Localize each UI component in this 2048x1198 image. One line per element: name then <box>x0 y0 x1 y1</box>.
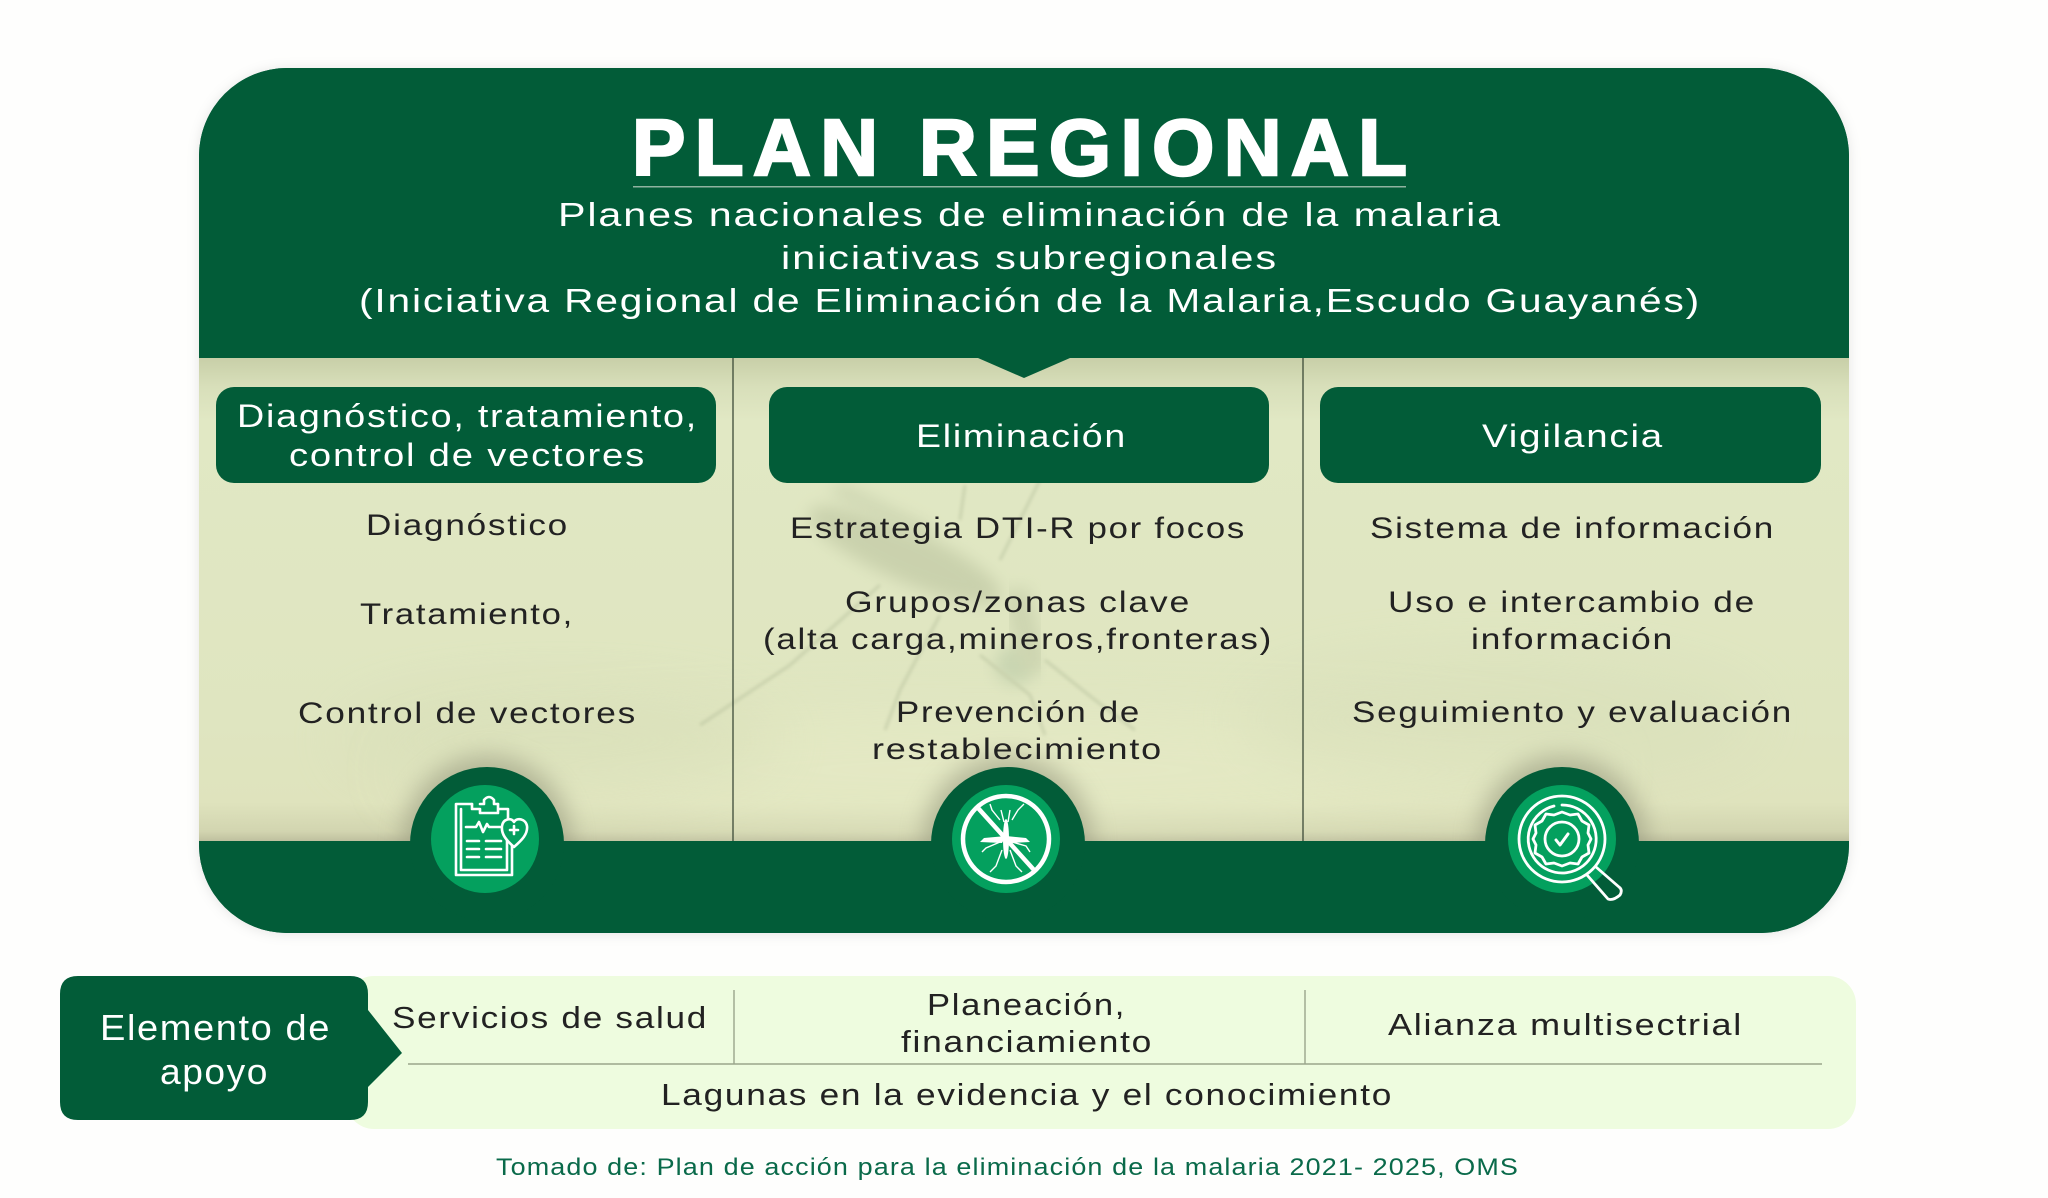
support item: alianza: Alianza multisectrial <box>1388 1007 1743 1042</box>
column 3 heading <box>1320 387 1821 483</box>
support tag: Elemento de <box>100 1007 331 1048</box>
column 2 heading <box>769 387 1269 483</box>
column 2 items: restablecimiento <box>872 733 1163 766</box>
support item: planeación: Planeación, <box>927 987 1126 1022</box>
subtitle <box>359 196 1701 319</box>
panel: plan regional <box>199 68 1849 933</box>
source note: Tomado de: Plan de acción para la eliminación de la malaria 2021- 2025, OMS <box>496 1154 1519 1181</box>
column 2 items: Grupos/zonas clave <box>845 586 1191 619</box>
support item: planeación <box>901 987 1153 1059</box>
support item: planeación: financiamiento <box>901 1024 1153 1059</box>
column 3 items: Uso e intercambio de <box>1388 586 1756 619</box>
column 1 items: Diagnóstico <box>366 509 569 542</box>
column 1 heading: control de vectores <box>289 437 646 473</box>
support tag: apoyo <box>160 1051 269 1092</box>
icon: clipboard with heart <box>410 767 564 921</box>
column 2 items: (alta carga,mineros,fronteras) <box>763 623 1273 656</box>
subtitle: iniciativas subregionales <box>781 239 1278 276</box>
icon: no mosquito <box>931 767 1085 921</box>
panel body background <box>199 358 1849 841</box>
subtitle: (Iniciativa Regional de Eliminación de la Malaria,Escudo Guayanés) <box>359 282 1701 319</box>
title: PLAN REGIONAL <box>632 103 1407 192</box>
footer band <box>199 841 1849 933</box>
support strip background <box>346 976 1856 1129</box>
subtitle: Planes nacionales de eliminación de la malaria <box>558 196 1502 233</box>
panel: support elements <box>60 976 1856 1129</box>
column 3 heading: Vigilancia <box>1482 418 1664 454</box>
support item: servicios: Servicios de salud <box>392 1000 708 1035</box>
column 1 heading: Diagnóstico, tratamiento, <box>237 398 698 434</box>
column 3 items: información <box>1471 623 1674 656</box>
column 1 heading <box>216 387 716 483</box>
column 1 items: Control de vectores <box>298 697 637 730</box>
support grid lines <box>408 990 1822 1064</box>
column 2 heading: Eliminación <box>916 418 1127 454</box>
mosquito background image <box>700 480 1135 735</box>
column 3 items: Seguimiento y evaluación <box>1352 696 1793 729</box>
column 2 items: Prevención de <box>896 696 1141 729</box>
column 1 items: Tratamiento, <box>360 598 574 631</box>
column divider lines <box>733 358 1303 841</box>
column 3 items: Sistema de información <box>1370 512 1775 545</box>
column 3 items <box>1352 512 1793 729</box>
header band <box>199 68 1849 156</box>
icon: magnifier with seal <box>1485 767 1639 921</box>
column 1 items <box>298 509 637 730</box>
column 2 items <box>763 512 1273 766</box>
column 2 items: Estrategia DTI-R por focos <box>790 512 1246 545</box>
support tag <box>60 976 402 1120</box>
support item: lagunas: Lagunas en la evidencia y el conocimiento <box>661 1077 1393 1112</box>
header pointer <box>978 358 1070 378</box>
